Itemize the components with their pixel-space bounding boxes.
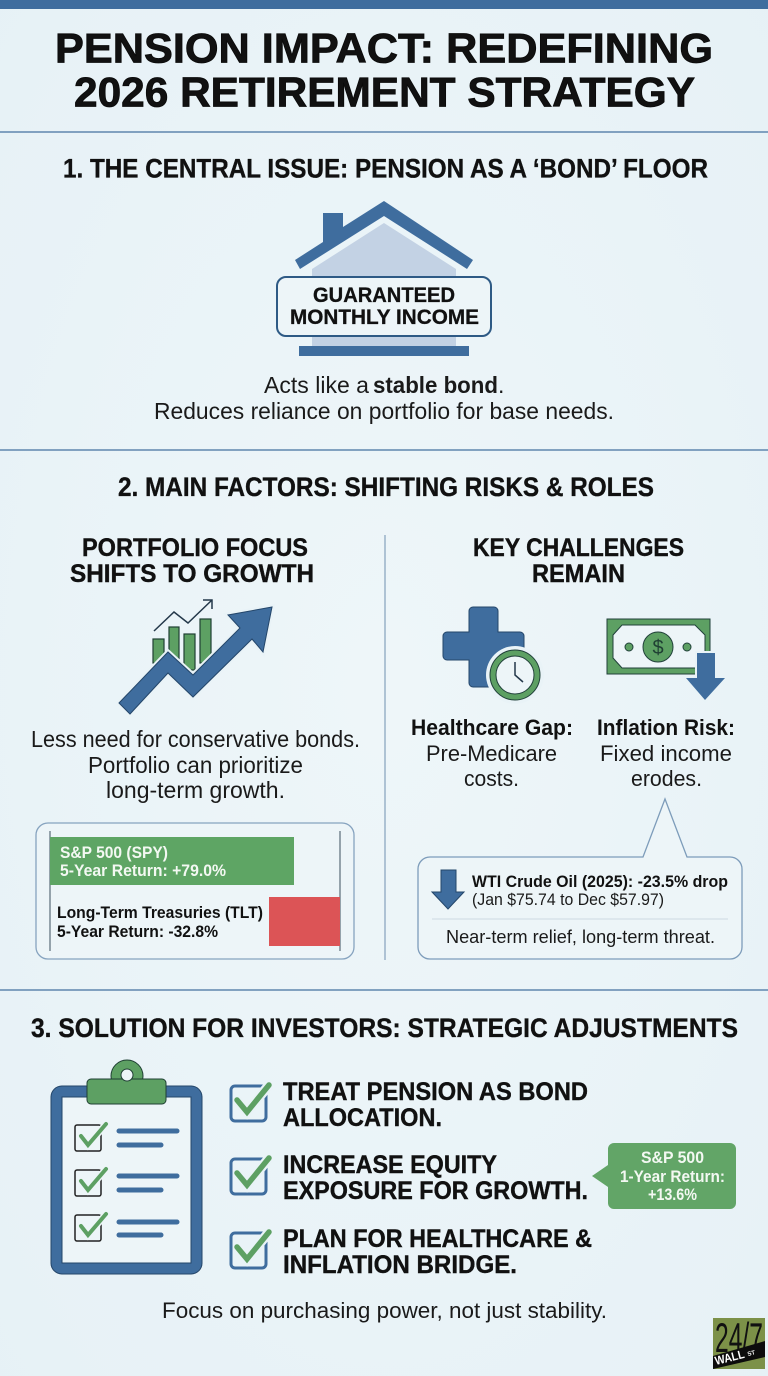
item: plan for healthcare and inflation: PLAN FOR HEALTHCARE & [283,1225,592,1253]
icon: clipboard checklist [51,1060,202,1274]
item: plan for healthcare and inflation [231,1225,592,1279]
text: inflation risk: Inflation Risk: [597,715,735,740]
heading: key challenges remain: KEY CHALLENGES [473,534,684,562]
bar: long-term treasuries: 5-Year Return: -32.8% [57,922,218,941]
item: treat pension as bond allocation: ALLOCATION. [283,1104,442,1132]
text: stable bond description: Reduces reliance on portfolio for base needs. [154,398,614,424]
text: crude oil figures: WTI Crude Oil (2025): -23.5% drop [472,872,728,891]
icon: dollar bill with down arrow: $ [652,637,664,659]
text: inflation risk [597,715,735,791]
bar: long-term treasuries: Long-Term Treasuries (TLT) [57,903,263,922]
heading: portfolio focus shifts to growth: SHIFTS TO GROWTH [70,560,314,588]
text: portfolio description: Portfolio can prioritize [88,752,303,778]
text: portfolio description: Less need for conservative bonds. [31,726,360,752]
bar: S&P 500: S&P 500 (SPY) [60,843,168,862]
item: treat pension as bond allocation: TREAT PENSION AS BOND [283,1078,588,1106]
icon: house with guaranteed income label [277,201,491,356]
heading: section 1: 1. THE CENTRAL ISSUE: PENSION AS A ‘BOND’ FLOOR [63,154,708,184]
heading: portfolio focus shifts to growth [70,534,314,588]
label: guaranteed monthly income: MONTHLY INCOME [290,306,479,329]
callout: S&P 500 one-year return: S&P 500 [641,1148,704,1167]
callout: S&P 500 one-year return [592,1143,736,1209]
title: PENSION IMPACT: REDEFINING [55,24,713,72]
logo: 24/7 Wall St: WALL [713,1347,746,1368]
bar: S&P 500: 5-Year Return: +79.0% [60,861,226,880]
section 1: the central issue [63,154,708,424]
text: closing statement: Focus on purchasing power, not just stability. [162,1298,607,1323]
text: portfolio description: long-term growth. [106,777,285,803]
title [55,24,713,116]
item: treat pension as bond allocation [231,1078,588,1132]
panel: portfolio focus [31,534,360,959]
text: portfolio description [31,726,360,803]
icon: down arrow [432,870,464,909]
text: stable bond description: . [498,372,504,398]
list: strategic adjustments [231,1078,592,1279]
section 3: solution for investors [31,1013,738,1323]
text: healthcare gap: costs. [464,766,519,791]
text: inflation risk: erodes. [631,766,702,791]
text: crude oil figures [472,872,728,909]
panel: key challenges [411,534,742,959]
text: inflation risk: Fixed income [600,741,732,766]
heading: key challenges remain [473,534,684,588]
top bar [0,0,768,9]
item: increase equity exposure: EXPOSURE FOR GROWTH. [283,1177,588,1205]
text: healthcare gap: Healthcare Gap: [411,715,573,740]
bar: S&P 500 [50,837,294,885]
bar: long-term treasuries [57,897,340,946]
label: guaranteed monthly income: GUARANTEED [313,284,455,307]
icon: growth arrow and bars [119,600,272,714]
text: crude oil figures: (Jan $75.74 to Dec $57.97) [472,890,664,909]
text: healthcare gap [411,715,573,791]
item: increase equity exposure: INCREASE EQUITY [283,1151,497,1179]
heading: portfolio focus shifts to growth: PORTFOLIO FOCUS [82,534,308,562]
label: guaranteed monthly income [277,277,491,336]
text: healthcare gap: Pre-Medicare [426,741,557,766]
heading: key challenges remain: REMAIN [532,560,625,588]
callout: S&P 500 one-year return: +13.6% [648,1185,697,1204]
item: plan for healthcare and inflation: INFLATION BRIDGE. [283,1251,517,1279]
icon: medical cross with clock [443,607,544,704]
callout: WTI crude oil [418,799,742,959]
title: 2026 RETIREMENT STRATEGY [74,68,695,116]
text: near-term relief: Near-term relief, long-term threat. [446,927,715,947]
section 2: main factors [31,472,742,960]
item: increase equity exposure [231,1151,588,1205]
text: stable bond description: stable bond [373,372,498,398]
text: stable bond description: Acts like a [264,372,369,398]
text: stable bond description [154,372,614,424]
logo: 24/7 Wall St: ST [747,1350,756,1358]
callout: S&P 500 one-year return: 1-Year Return: [620,1167,725,1186]
icon: dollar bill with down arrow [607,619,725,700]
chart: five-year returns [36,823,354,959]
heading: section 2: 2. MAIN FACTORS: SHIFTING RISKS & ROLES [118,472,654,502]
